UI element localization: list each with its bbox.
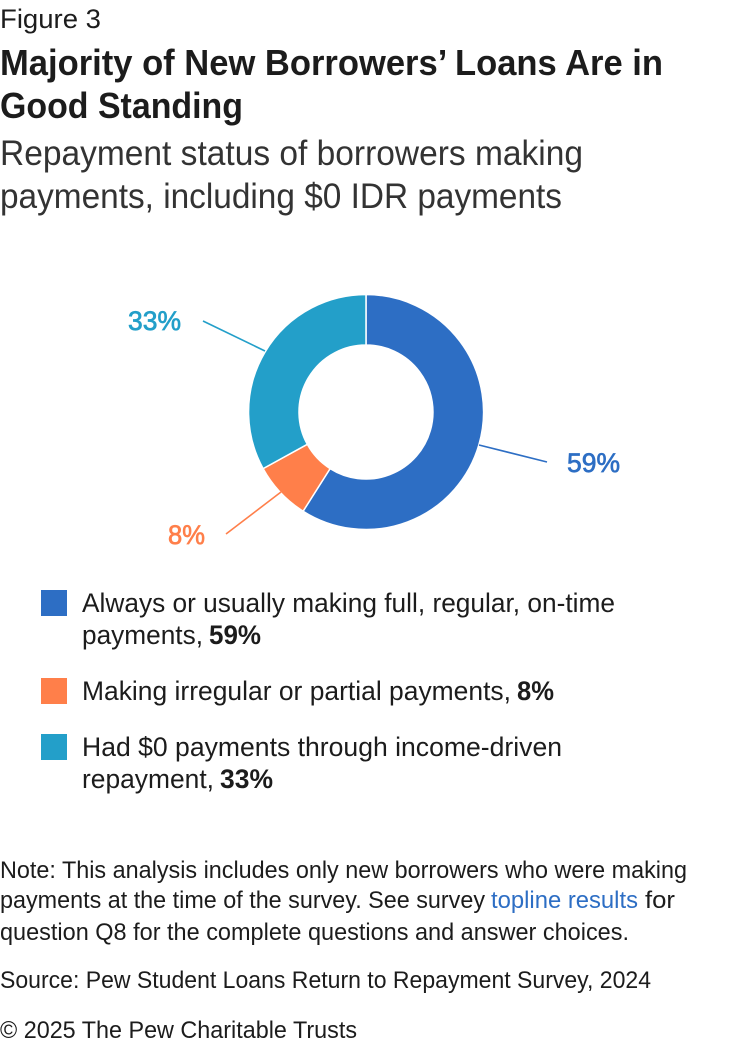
note: for: [645, 887, 675, 914]
figure label: Figure 3: [0, 4, 101, 34]
callout: 33%: 33%: [128, 306, 181, 336]
copyright: © 2025 The Pew Charitable Trusts: [0, 1017, 357, 1044]
note: Note: This analysis includes only new borrowers who were making: [0, 857, 687, 884]
segment: irregular or partial 8%: [263, 444, 330, 511]
legend item: on-time payments: payments,: [82, 620, 203, 650]
note: [0, 857, 687, 946]
segment: always or usually on-time 59%: [303, 294, 484, 529]
legend item: on-time payments: Always or usually making full, regular, on-time: [82, 588, 615, 618]
segment: $0 IDR payments 33%: [249, 294, 366, 469]
legend: [41, 588, 615, 794]
callout: 33%: [128, 306, 265, 351]
subtitle: payments, including $0 IDR payments: [0, 177, 562, 216]
subtitle: Repayment status of borrowers making: [0, 134, 583, 173]
note: topline results: [491, 887, 638, 914]
source: Source: Pew Student Loans Return to Repayment Survey, 2024: [0, 967, 651, 994]
legend item: irregular payments: Making irregular or partial payments,: [82, 676, 511, 706]
legend item: $0 payments: Had $0 payments through income-driven: [82, 732, 562, 762]
legend item: $0 payments: repayment,: [82, 764, 214, 794]
legend item: $0 payments: 33%: [220, 764, 273, 794]
legend item: on-time payments: [41, 588, 615, 650]
callout: 8%: [168, 492, 281, 550]
title: Majority of New Borrowers’ Loans Are in: [0, 42, 663, 83]
note: payments at the time of the survey. See survey: [0, 887, 485, 914]
legend item: irregular payments: 8%: [517, 676, 554, 706]
legend item: $0 payments: [41, 732, 562, 794]
note: question Q8 for the complete questions and answer choices.: [0, 919, 629, 946]
callout: 8%: 8%: [168, 520, 205, 550]
donut chart: [249, 294, 484, 529]
callout: 59%: [479, 445, 620, 478]
title: Good Standing: [0, 85, 243, 126]
subtitle: [0, 134, 583, 216]
title: [0, 42, 663, 126]
legend item: on-time payments: 59%: [209, 620, 261, 650]
callout: 59%: 59%: [567, 448, 620, 478]
